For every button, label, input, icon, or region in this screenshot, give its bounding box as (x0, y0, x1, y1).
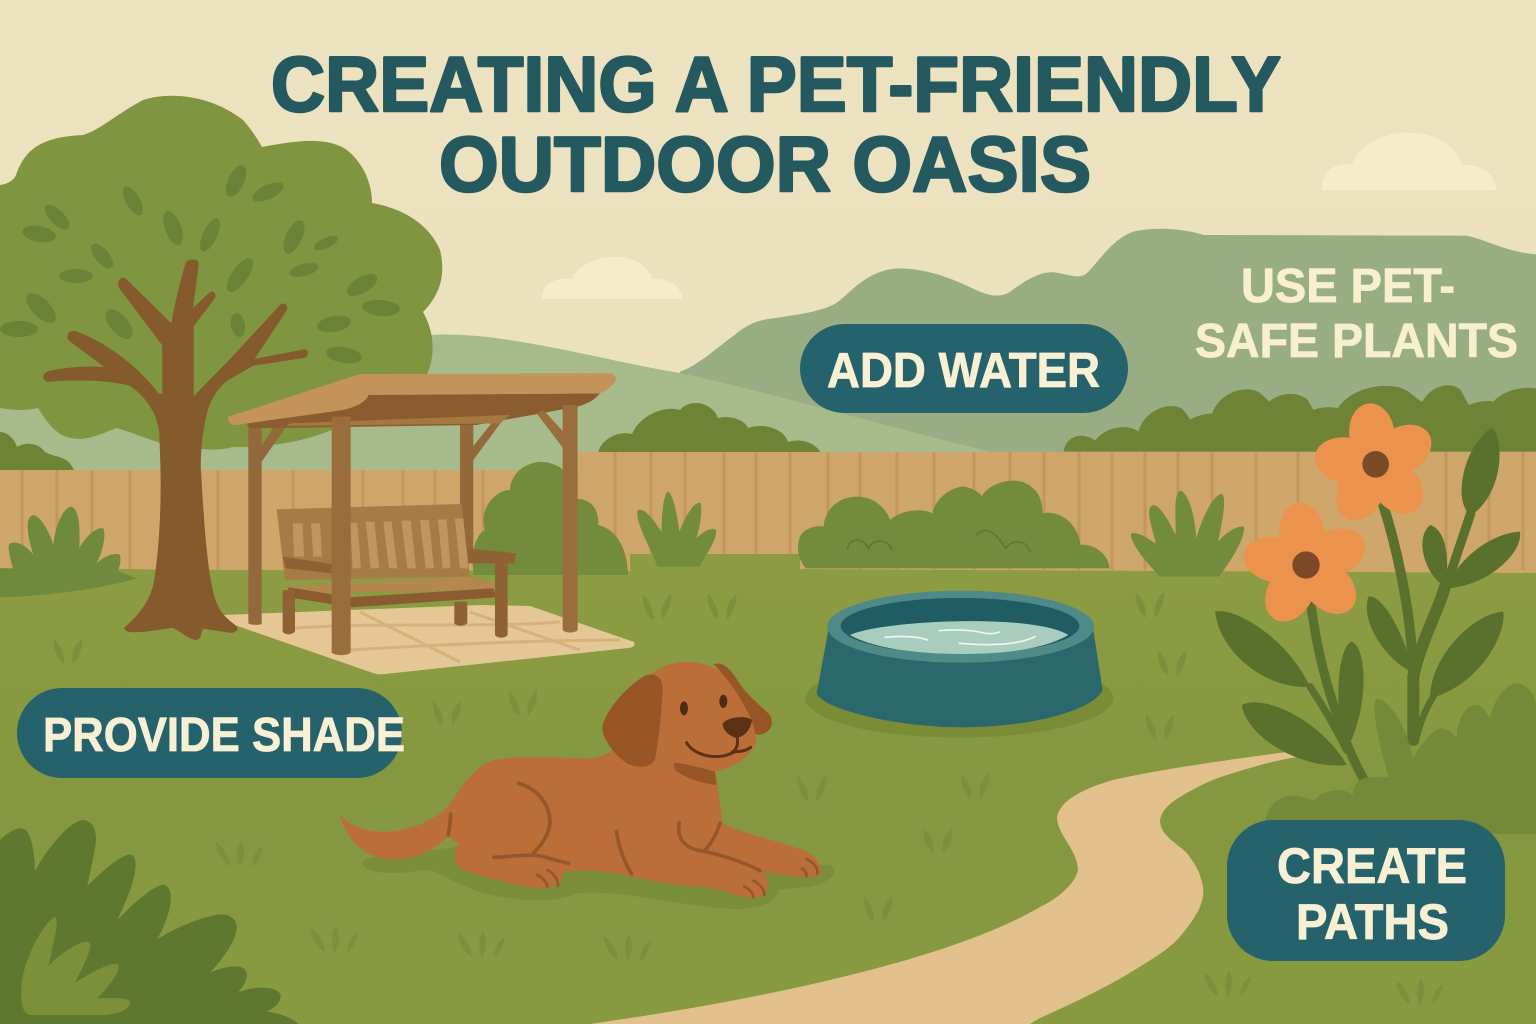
wooden fence (0, 452, 1536, 590)
dog shadow (362, 847, 834, 909)
tree (0, 96, 442, 639)
plant stems (1310, 503, 1471, 778)
roof underside (247, 393, 600, 428)
water bowl (805, 591, 1113, 738)
hill: left meadow (0, 334, 1000, 480)
label: use pet-safe plants (1195, 260, 1518, 368)
label: add water: ADD WATER (827, 344, 1100, 398)
label: provide shade (17, 688, 405, 778)
dog collar (674, 763, 717, 785)
shrubs along the fence (637, 481, 1244, 577)
paved patio (221, 605, 635, 674)
cloud: centre (543, 257, 682, 299)
water ripples (885, 630, 1035, 645)
tree trunk and branches (44, 260, 307, 639)
rear posts (248, 417, 503, 625)
hedge: behind right fence (1064, 385, 1536, 452)
shrub: behind pergola (473, 462, 628, 575)
label: add water (800, 324, 1128, 413)
plant at right (1215, 401, 1520, 778)
bench back (277, 504, 470, 580)
shrub: centre small (637, 492, 716, 567)
grass tufts (54, 592, 1443, 1005)
label: use pet-safe plants: USE PET- (1241, 260, 1455, 313)
label: create paths (1227, 820, 1505, 961)
shrub: left of fence (0, 507, 137, 597)
water surface (850, 621, 1068, 654)
dog (340, 662, 834, 909)
bench seat (288, 577, 500, 593)
title: CREATING A PET-FRIENDLY (271, 40, 1281, 128)
label: create paths: CREATE (1277, 838, 1467, 894)
label: create paths: PATHS (1296, 894, 1449, 950)
bowl rim (827, 591, 1094, 663)
title (271, 40, 1281, 208)
shrub: right small (1131, 491, 1244, 577)
canopy leaves (0, 162, 401, 366)
flower: lower (1240, 500, 1373, 631)
dog face (680, 695, 752, 757)
hedge: behind left fence (0, 432, 74, 470)
dog body (340, 662, 821, 898)
bowl body (817, 630, 1103, 727)
label: use pet-safe plants: SAFE PLANTS (1195, 315, 1518, 368)
tree canopy (0, 96, 442, 450)
label: provide shade: PROVIDE SHADE (43, 709, 405, 762)
dog contour lines (448, 783, 760, 874)
front posts (332, 405, 578, 655)
bench armrests and rails (283, 548, 517, 573)
bench legs (283, 563, 508, 638)
hedge: behind centre fence (598, 403, 821, 453)
bowl inner wall (841, 598, 1079, 654)
dog ears (602, 664, 772, 767)
mountains (680, 229, 1536, 460)
flower: upper (1312, 401, 1440, 529)
roof top (228, 373, 616, 425)
shrub squiggles (847, 531, 1030, 552)
shrub: centre wide (798, 481, 1110, 568)
bush: lower left foreground (0, 820, 298, 1024)
bench slats (293, 518, 468, 568)
plant leaves (1215, 427, 1520, 765)
title: OUTDOOR OASIS (439, 120, 1091, 208)
dog paws (537, 859, 817, 897)
bowl shadow (805, 659, 1113, 738)
pergola and bench (228, 373, 616, 655)
cloud: upper right (1322, 133, 1496, 190)
sand path (590, 752, 1298, 1024)
lawn (0, 554, 1536, 1024)
shrub: in front of plant (1265, 683, 1536, 834)
